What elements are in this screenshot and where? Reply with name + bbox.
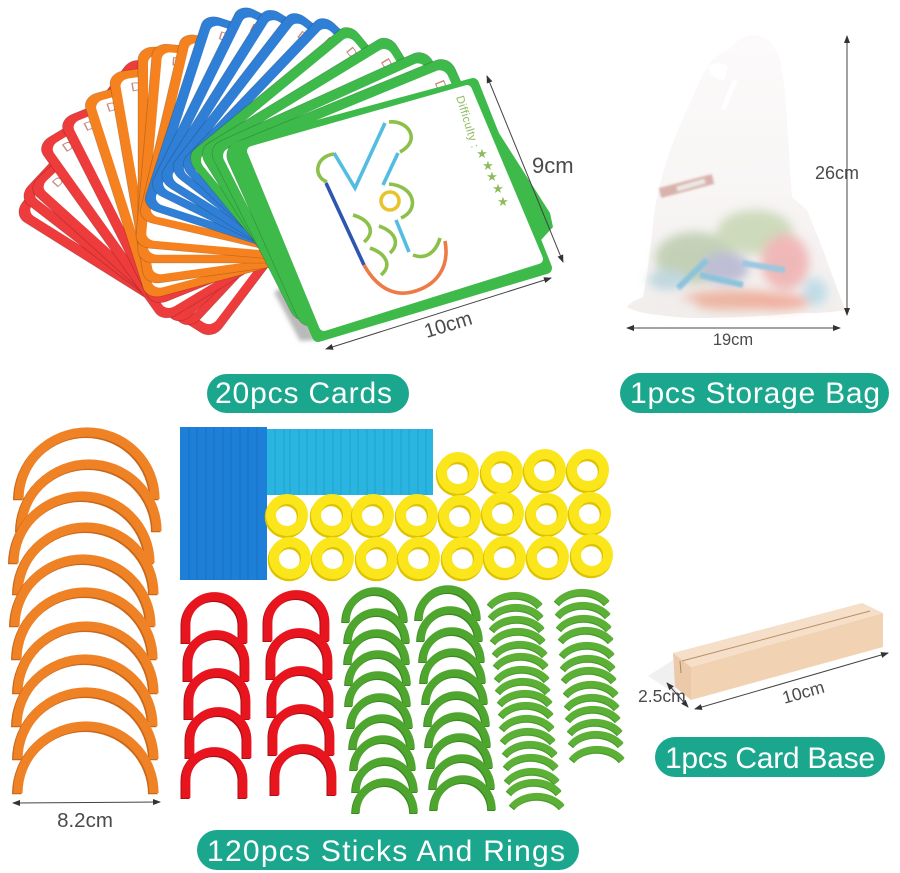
label: 1pcs Storage Bag: 1pcs Storage Bag [630, 377, 880, 410]
label: 1pcs Card Base: 1pcs Card Base [665, 742, 875, 775]
card difficulty label: ★ [476, 146, 488, 161]
dimension: bag height 26cm: 26cm [815, 163, 859, 183]
panel: orange semicircle pieces [13, 432, 157, 794]
dimension: base depth 2.5cm: 2.5cm [638, 686, 686, 706]
panel: green medium arches [345, 589, 492, 814]
bag contents [642, 210, 827, 311]
card difficulty label: ★ [482, 158, 494, 173]
blue cards [142, 3, 468, 303]
label: 120pcs Sticks And Rings: 120pcs Sticks And Rings [207, 835, 565, 868]
dimension: arc width 8.2cm: 8.2cm [57, 809, 113, 832]
red cards [13, 42, 338, 340]
green cards [185, 22, 553, 336]
card difficulty label: Difficulty : [453, 94, 480, 150]
card difficulty label: ★ [497, 194, 509, 209]
orange cards [82, 32, 377, 300]
panel: red arches [185, 594, 332, 799]
panel: fan of 20 cards [13, 3, 553, 341]
bag: visible sticks and tag [660, 179, 785, 288]
panel: wooden card base [648, 603, 883, 700]
dimension: card height 9cm [487, 76, 574, 262]
card shadow [274, 283, 316, 341]
dimension: card width 10cm: 10cm [422, 308, 475, 343]
panel: light blue sticks [267, 429, 433, 495]
card puzzle pattern: crocodile [318, 122, 446, 293]
panel: yellow rings [270, 454, 608, 576]
panel: storage bag [627, 35, 845, 318]
panel: dark blue sticks [180, 427, 267, 580]
dimension: bag width 19cm: 19cm [713, 331, 753, 349]
card difficulty label: ★ [486, 169, 498, 184]
dimension: base length 10cm [695, 653, 888, 709]
label: 20pcs Cards: 20pcs Cards [215, 377, 392, 410]
dimension: card width 10cm [326, 278, 551, 349]
dimension: base length 10cm: 10cm [780, 677, 827, 708]
card difficulty label [453, 94, 509, 209]
dimension: card height 9cm: 9cm [532, 153, 574, 178]
card difficulty label: ★ [492, 181, 504, 196]
panel: green small arcs [489, 592, 622, 808]
